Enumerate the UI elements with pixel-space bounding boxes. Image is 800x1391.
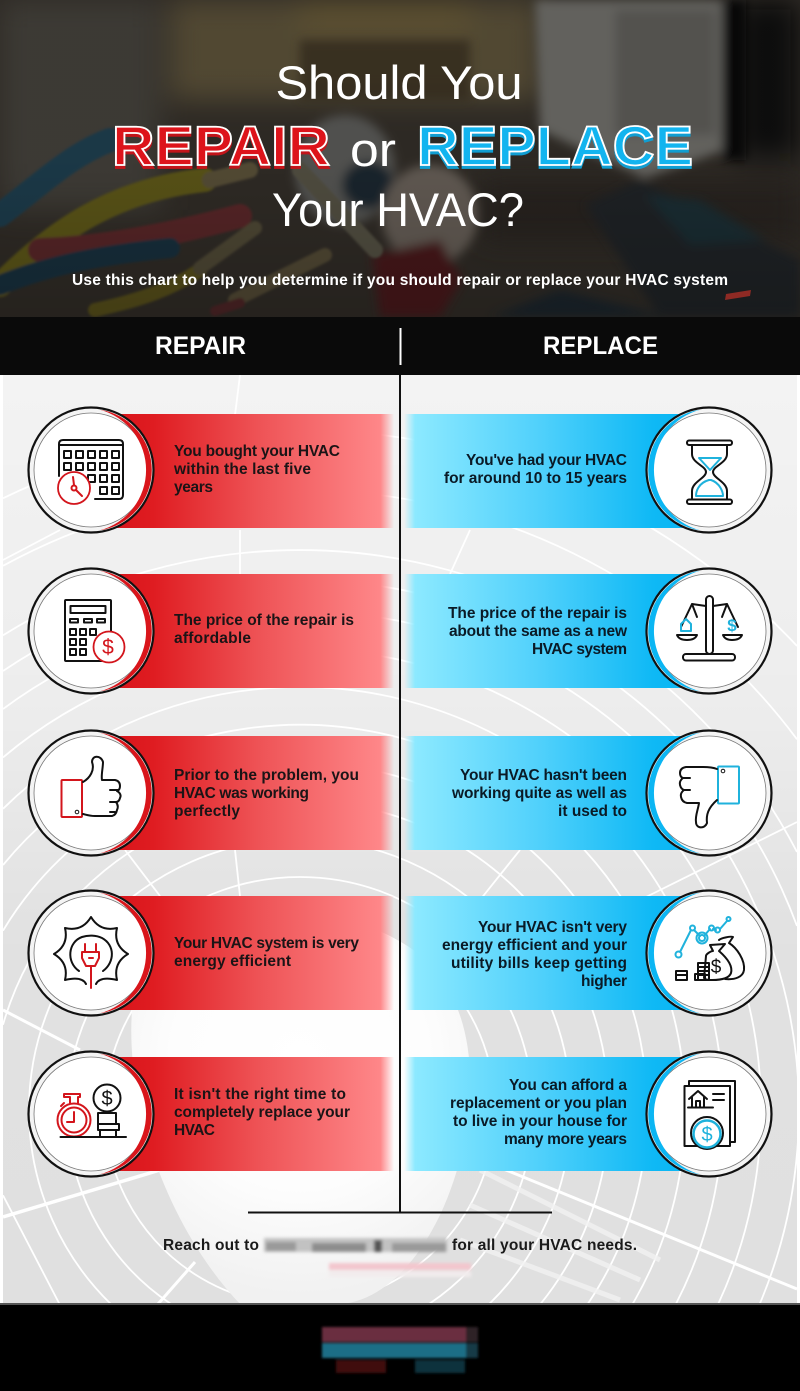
column header bar [0,317,800,375]
text: replace 1 [444,452,627,487]
icon: calculator with dollar coin: $ [102,636,114,659]
text: repair 2 [174,612,354,647]
text: repair 1 [173,443,340,496]
text: replace 2: The price of the repair is [448,605,627,622]
text: repair 5 [174,1086,350,1139]
panel: replace row 4 [404,890,772,1016]
icon: calculator with dollar coin [65,600,124,662]
text: replace 5: You can afford a [509,1077,627,1094]
text: replace 3: working quite as well as [451,785,627,802]
text: repair 2: The price of the repair is [174,612,354,629]
text: repair 5: completely replace your [174,1104,350,1121]
text: replace 4: higher [581,973,627,990]
text: repair 2: affordable [174,630,251,647]
text: replace 3: Your HVAC hasn't been [460,767,627,784]
text: replace 4 [442,919,627,990]
panel: repair row 3 [28,730,395,856]
icon: balance scale [677,596,742,660]
column header bar: REPLACE [543,332,658,360]
icon: money bags and rising chart [676,917,744,980]
fan background [3,375,799,1304]
text: replace 2: HVAC system [532,641,627,658]
panel: replace row 3 [404,730,772,856]
text: replace 1: You've had your HVAC [466,452,627,469]
text: repair 1: years [174,479,213,496]
panel: repair row 2 [28,568,395,694]
text: repair 4: energy efficient [174,953,291,970]
title: Should You [276,56,522,109]
hero photo background: HVAC gauges and hoses [0,0,800,317]
panel: replace row 1 [404,408,772,532]
icon: thumbs up [62,757,121,817]
panel: repair row 1 [28,408,395,532]
text: repair 1: within the last five [173,461,311,478]
text: repair 3: HVAC was working [174,785,309,802]
text: repair 5: It isn't the right time to [174,1086,346,1103]
text: replace 2: about the same as a new [449,623,628,640]
icon: thumbs down [680,766,739,827]
text: replace 5: replacement or you plan [450,1095,627,1112]
text: replace 4: Your HVAC isn't very [478,919,627,936]
text: replace 3 [451,767,627,820]
panel: repair row 4 [28,890,395,1016]
icon: balance scale: $ [727,616,737,635]
column header bar: REPAIR [155,332,246,360]
text: replace 5: to live in your house for [453,1113,627,1130]
title [112,56,693,236]
call to action text [163,1237,637,1254]
subtitle: Use this chart to help you determine if you should repair or replace your HVAC system [72,272,728,289]
panel: replace row 5 [404,1052,772,1176]
icon: house document and coin: $ [701,1124,713,1146]
text: repair 4 [174,935,359,970]
icon: stopwatch and coins [58,1084,126,1137]
call to action text: for all your HVAC needs. [452,1237,637,1254]
text: replace 5 [450,1077,627,1148]
text: replace 5: many more years [504,1131,627,1148]
icon: calendar with clock [58,440,123,504]
panel: replace row 2 [404,568,772,694]
text: replace 4: utility bills keep getting [451,955,627,972]
title: REPAIR [112,114,330,177]
blurred footer logo [322,1327,478,1373]
title: or [350,123,396,176]
call to action text: Reach out to [163,1237,259,1254]
panel: repair row 5 [28,1052,395,1176]
text: repair 5: HVAC [174,1122,215,1139]
text: repair 4: Your HVAC system is very [174,935,359,952]
icon: energy plug [54,917,128,988]
title: Your HVAC? [272,183,524,236]
text: replace 1: for around 10 to 15 years [444,470,627,487]
icon: stopwatch and coins: $ [101,1088,113,1110]
icon: house document and coin [684,1081,735,1149]
text: replace 3: it used to [558,803,627,820]
icon: hourglass [687,440,732,504]
title: REPLACE [417,114,693,177]
blurred contact line [329,1263,471,1277]
text: repair 3 [174,767,359,820]
icon: money bags and rising chart: $ [711,957,722,978]
text: repair 1: You bought your HVAC [174,443,340,460]
center divider line [248,375,552,1214]
footer bar [0,1303,800,1391]
text: repair 3: Prior to the problem, you [174,767,359,784]
text: repair 3: perfectly [174,803,240,820]
text: replace 4: energy efficient and your [442,937,627,954]
text: replace 2 [448,605,628,658]
